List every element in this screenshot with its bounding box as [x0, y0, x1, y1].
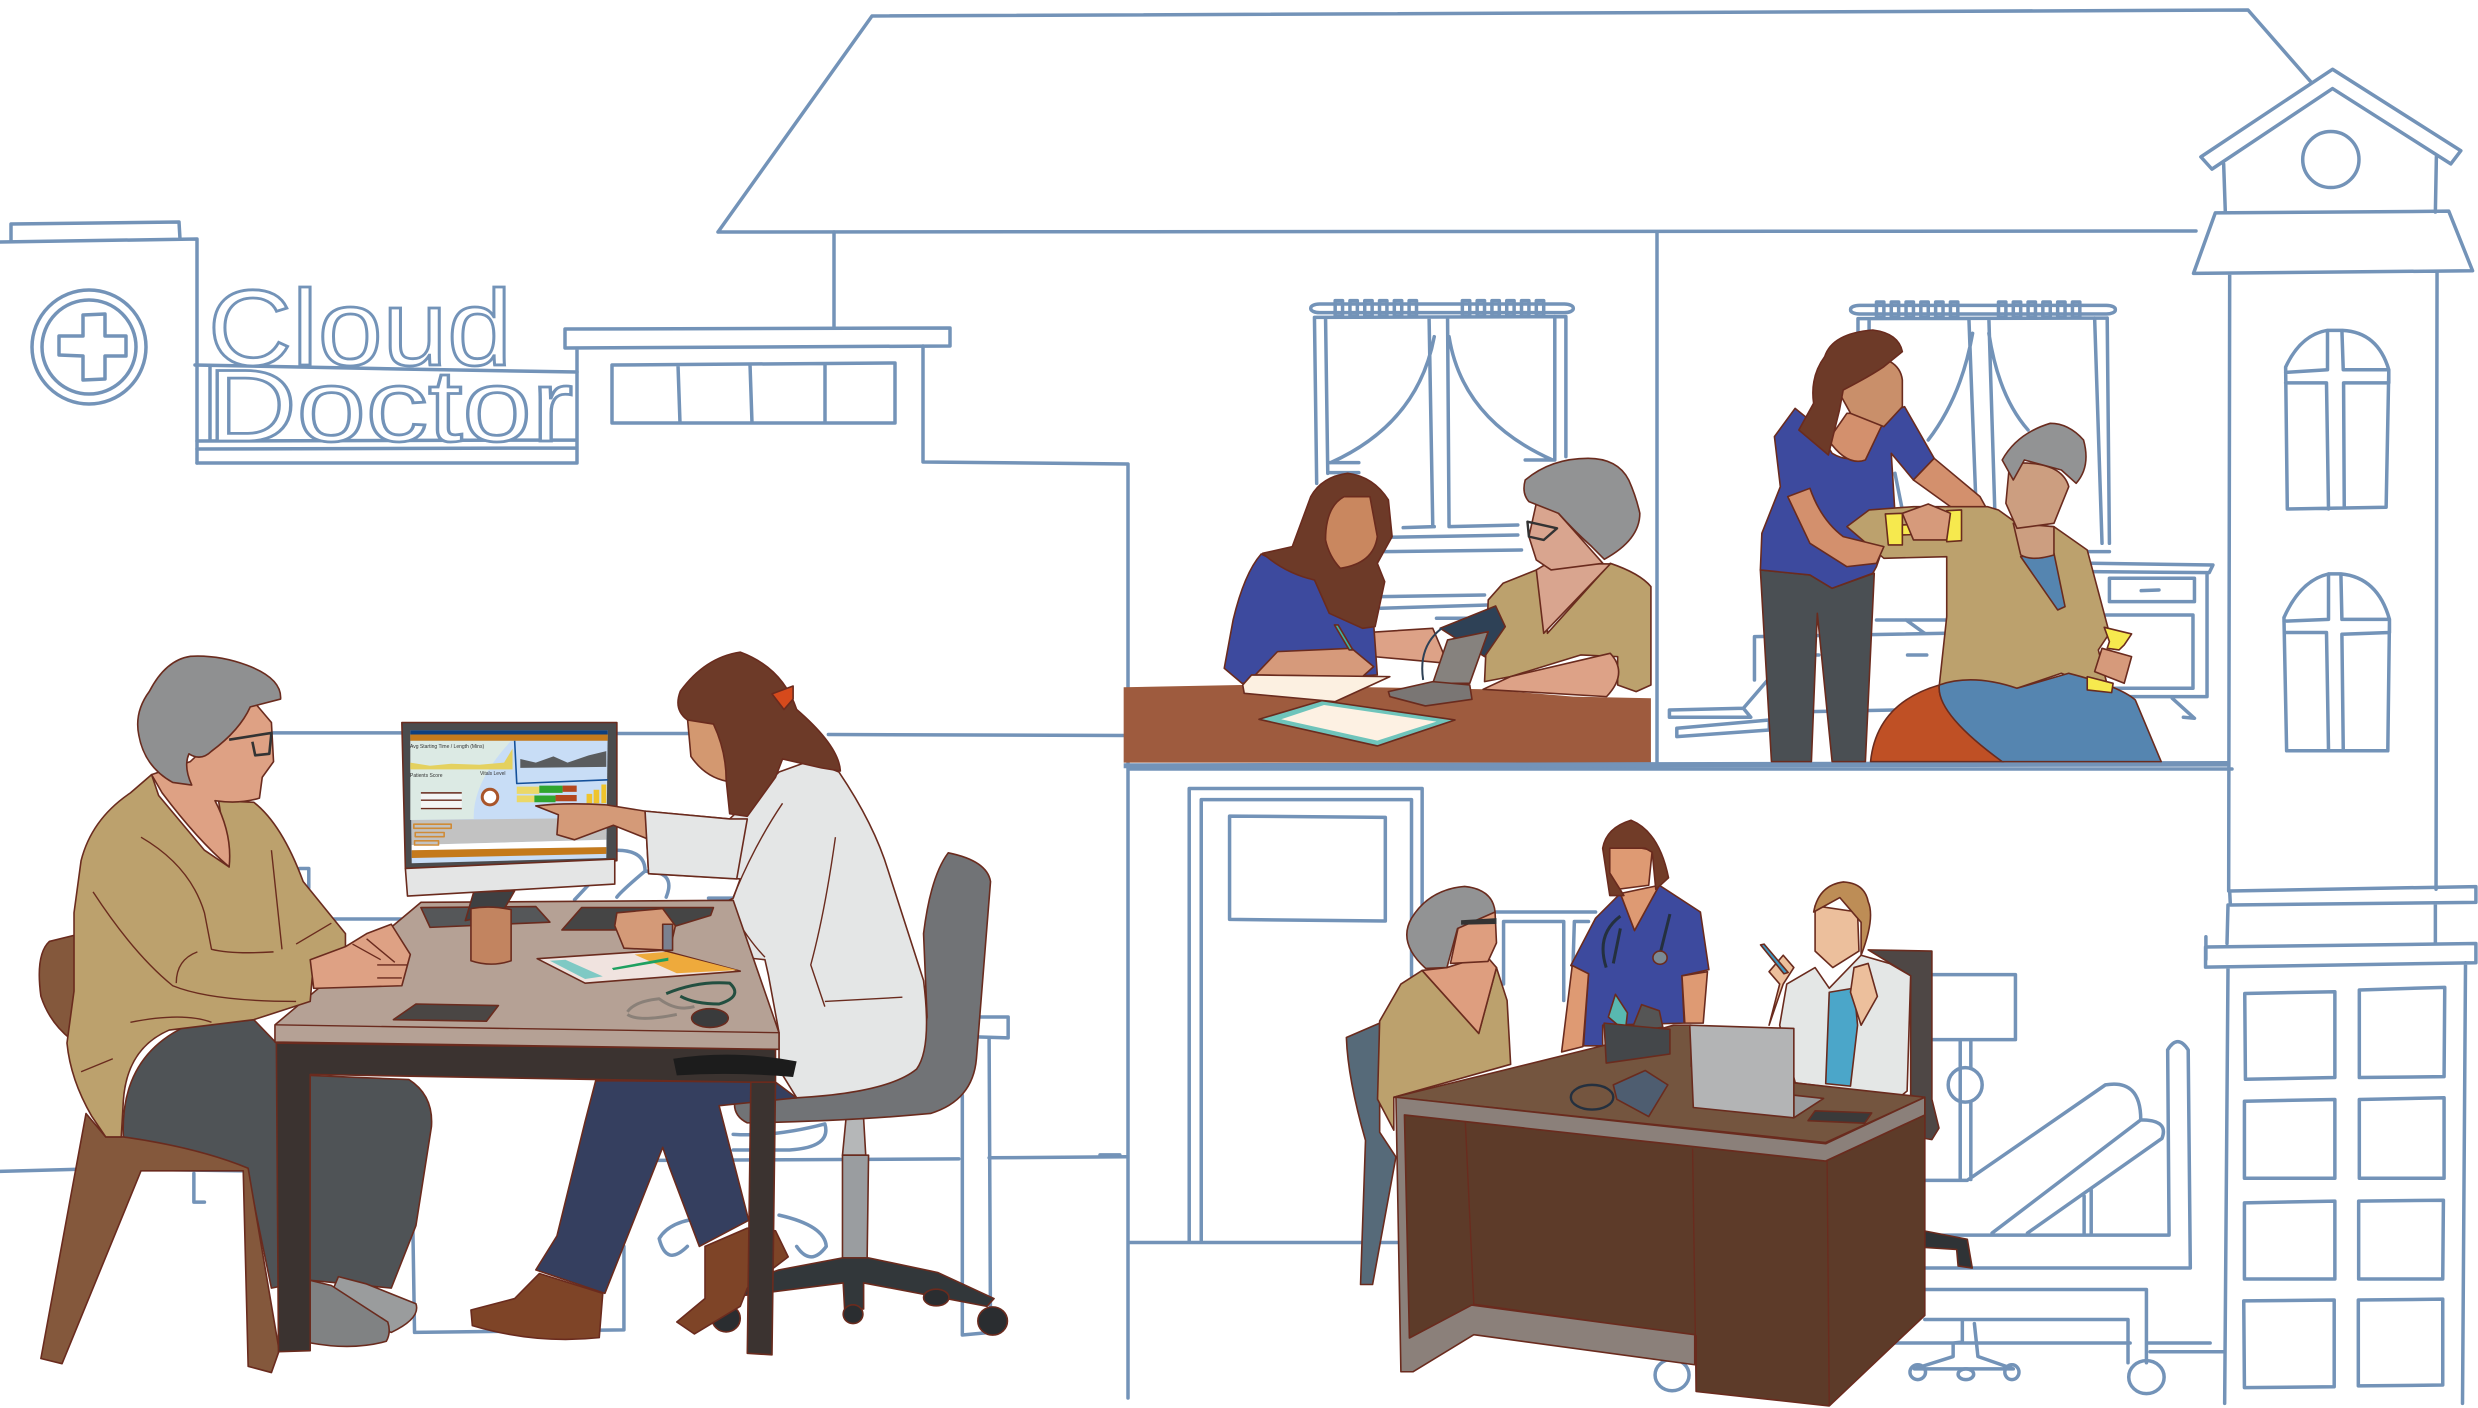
- patient head and neck: [138, 656, 281, 867]
- logo word: Cloud: Cloud: [208, 267, 512, 388]
- phone on desk: [1808, 1111, 1872, 1123]
- wooden chair back: [39, 934, 88, 1039]
- therapist trousers: [1760, 570, 1874, 762]
- yellow dumbbells: [1885, 510, 2132, 693]
- nurse hair: [1263, 473, 1392, 628]
- laptop: [1690, 1025, 1824, 1118]
- exerciser sweater: [1847, 507, 2109, 693]
- stethoscope: [627, 983, 735, 1027]
- consultation room line art: [0, 733, 1127, 1335]
- tablet on table: [562, 908, 713, 930]
- sign frame: [195, 365, 577, 463]
- doctor hand with watch: [615, 909, 675, 950]
- tower: [2150, 69, 2476, 1403]
- exerciser blue top: [2021, 553, 2065, 610]
- blood pressure cuff on desk: [1571, 1070, 1668, 1117]
- nurse writing hand: [1255, 648, 1374, 677]
- desk front panels: [1404, 1115, 1925, 1406]
- entrance canopy and panel: [565, 328, 950, 423]
- senior patient sweater: [1485, 563, 1651, 692]
- floor beam: [1124, 761, 2229, 768]
- tower ground floor windows: [2244, 987, 2445, 1388]
- scene: nurse measuring blood pressure and therapy session: [1124, 330, 2229, 768]
- dashboard small labels: [410, 744, 505, 779]
- grey office chair: [712, 853, 1007, 1335]
- table line art behind therapist: [1669, 620, 1947, 737]
- doctor head and hair: [1814, 882, 1871, 968]
- desk surface: [1124, 685, 1651, 763]
- patient shoes: [310, 1277, 417, 1346]
- therapist blue shirt: [1760, 407, 1934, 588]
- doctor arm sleeve: [645, 811, 747, 879]
- pen holder: [1604, 994, 1670, 1063]
- curtain window room 1: [1311, 301, 1573, 618]
- bed wheels: [1655, 1068, 2164, 1394]
- blood pressure monitor: [1388, 628, 1488, 706]
- notebook: [1243, 675, 1390, 702]
- nurse face: [1326, 497, 1377, 568]
- doctor boots: [471, 1228, 788, 1339]
- tower ledges: [2150, 887, 2476, 1403]
- doctor head and hair: [678, 652, 840, 816]
- clipboard on desk: [1259, 701, 1455, 746]
- smartphone on table: [393, 1004, 498, 1021]
- curtain window room 2: [1851, 302, 2115, 552]
- chair base: [1925, 1231, 1972, 1268]
- tower round window: [2303, 131, 2359, 188]
- door: [1189, 789, 1422, 1241]
- score label: Patients Score: [410, 773, 443, 779]
- doctor pointing arm: [536, 804, 647, 840]
- icon: medical cross emblem: [32, 290, 146, 404]
- blood pressure cuff: [1440, 606, 1505, 657]
- scene: patient and doctor at computer: [39, 652, 1007, 1373]
- clipboard with notes: [537, 950, 740, 983]
- tower cornice: [2194, 211, 2473, 891]
- hospital bed: [1893, 975, 2210, 1369]
- floor and cabinet: [1100, 912, 2206, 1243]
- patient clasped hands: [310, 924, 410, 988]
- senior patient face and hair: [1524, 458, 1640, 570]
- doctor coat: [1780, 955, 1911, 1108]
- doctor chair: [1868, 950, 1939, 1140]
- pen cup: [471, 907, 511, 964]
- table: [275, 900, 797, 1355]
- senior patient arm: [1483, 653, 1619, 697]
- exerciser hands: [1902, 504, 2132, 683]
- therapist head and hair: [1799, 330, 1902, 455]
- tower window lower: [2284, 574, 2389, 751]
- patient chest: [1422, 955, 1496, 1033]
- patient trousers: [123, 1020, 432, 1288]
- upper and lower building walls: [834, 232, 2232, 1398]
- therapist shoulder arm: [1913, 458, 1991, 518]
- tower gable roof: [2201, 69, 2461, 212]
- therapist chest: [1828, 413, 1888, 461]
- logo word: Doctor: Doctor: [207, 349, 573, 463]
- patient mustard cardigan: [1378, 968, 1511, 1130]
- nurse stethoscope: [1603, 914, 1670, 968]
- visitor chair: [1346, 1023, 1396, 1284]
- patient sweater: [67, 775, 345, 1137]
- tower window upper: [2286, 330, 2389, 509]
- computer monitor: [402, 723, 617, 927]
- nurse blue blouse: [1224, 554, 1377, 683]
- pen: [1334, 625, 1353, 650]
- logo: Cloud Doctor: [207, 267, 573, 463]
- desk panel seams: [1465, 1122, 1829, 1406]
- doctor jeans: [536, 1081, 797, 1293]
- therapy ball: [1871, 685, 2004, 762]
- senior patient neck: [1536, 563, 1610, 633]
- therapist forearm: [1788, 488, 1884, 567]
- nurse arms: [1562, 885, 1707, 1052]
- desk grey edge: [1396, 1097, 1925, 1372]
- desk top: [1394, 1025, 1925, 1142]
- chart label: Avg Starting Time / Length (Mins): [410, 744, 484, 750]
- scene: doctor and nurse consulting patient at desk: [1346, 820, 1972, 1406]
- exerciser blue trousers: [1939, 673, 2161, 762]
- nurse scrubs: [1571, 885, 1709, 1046]
- monitor dashboard screen: [410, 730, 608, 863]
- patient arm extended: [1309, 628, 1448, 663]
- patient head and hair: [1407, 886, 1496, 968]
- vitals label: Vitals Level: [480, 771, 505, 777]
- exerciser neck and face: [2002, 423, 2086, 558]
- doctor white coat: [645, 761, 927, 1098]
- nurse head and hair: [1603, 820, 1669, 896]
- left hospital wing: [0, 222, 197, 463]
- dresser: [2091, 563, 2213, 718]
- wooden chair seat and legs: [41, 1113, 279, 1373]
- roof outline: [718, 10, 2311, 232]
- room 1 and 2 window line art: [1311, 301, 2213, 737]
- doctor teal scrubs: [1826, 988, 1858, 1086]
- doctor hands and pen: [1761, 944, 1877, 1025]
- ground floor line art: [1100, 789, 2210, 1394]
